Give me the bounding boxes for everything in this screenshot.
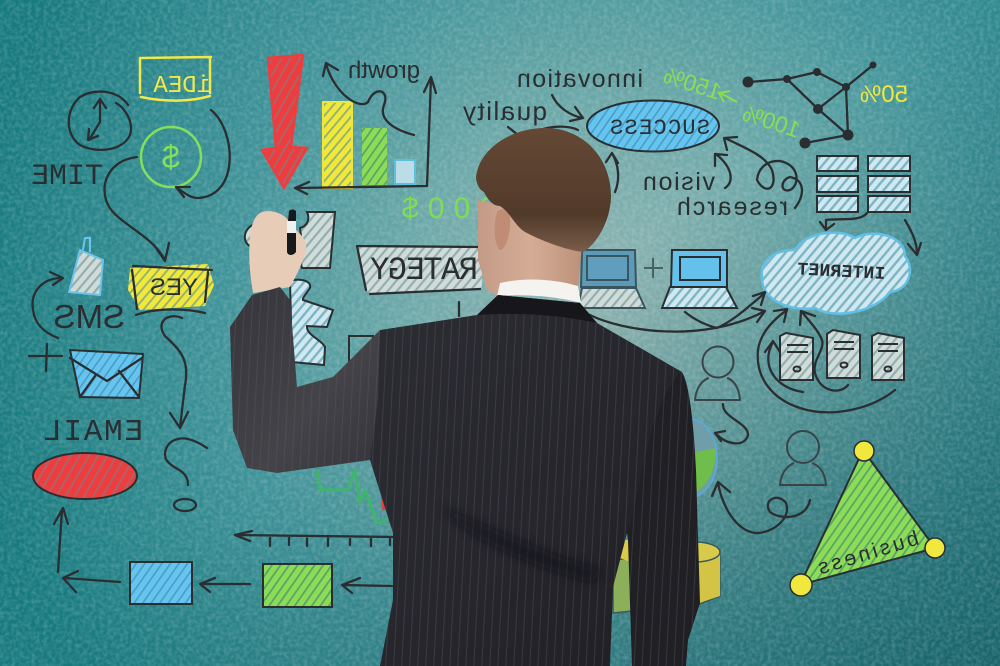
shirt collar [497, 279, 581, 303]
success oval [587, 100, 719, 152]
percent labels: 100% [740, 100, 803, 143]
icon: clock [69, 92, 131, 150]
label: sms with loop arrow: SMS [53, 298, 125, 335]
database cylinder [613, 540, 720, 613]
ear [495, 209, 510, 250]
arrow: person to pie [715, 404, 748, 443]
business triangle [790, 441, 945, 596]
green box [263, 564, 332, 607]
percent labels [661, 62, 803, 143]
marker cap [288, 210, 296, 221]
icon: idea sign: iDEA [153, 73, 211, 100]
arrow: innovation to success [552, 95, 583, 121]
hair [476, 128, 611, 252]
arrows: laptops to cloud [590, 292, 765, 332]
label: yes bubble: YES [150, 274, 198, 301]
strategy banner: RATEGY [370, 252, 478, 289]
icon: idea sign [140, 57, 211, 101]
squiggle question mark [165, 438, 207, 511]
hand [249, 211, 306, 293]
jacket collar [477, 295, 597, 323]
arrow: green to blue [200, 578, 250, 592]
bar chart [295, 77, 436, 194]
dollar amount: 000$ [402, 192, 496, 225]
sleeve pinstripes [627, 372, 700, 666]
arm pinstripes [230, 287, 380, 473]
puzzle pieces [245, 212, 335, 365]
label: yes bubble [128, 264, 214, 315]
arrow: into left corner [63, 571, 120, 592]
label: time: TIME [31, 160, 103, 194]
small box behind arm [349, 336, 374, 368]
internet cloud [762, 233, 910, 314]
blue box [130, 562, 192, 604]
marker band [287, 221, 296, 233]
internet cloud: INTERNET [797, 260, 886, 285]
icon: dollar coin [141, 127, 201, 187]
arrow: coin to yes [104, 157, 169, 261]
strategy banner [357, 246, 482, 316]
back creases [440, 505, 600, 580]
green scribble near elbow [317, 470, 388, 523]
success oval: SUCCESS [610, 116, 710, 141]
red oval [33, 453, 137, 499]
desktop towers [780, 330, 904, 380]
label: vision and research: vision [643, 168, 715, 196]
label: vision and research: research [677, 193, 788, 221]
long timeline arrow [235, 531, 395, 546]
icon: envelope [70, 350, 143, 398]
arrow: head to success [508, 127, 618, 192]
man [230, 128, 700, 666]
percent labels: 150% [661, 62, 724, 105]
label: email: EMAIL [43, 415, 143, 450]
arrow: person loop [712, 482, 810, 533]
marker [287, 232, 296, 255]
network diagram [742, 62, 876, 148]
icon: dollar coin: $ [162, 139, 180, 175]
laptops [578, 250, 737, 308]
neck [478, 200, 583, 296]
arrow: idea to coin [176, 110, 230, 198]
arrow: bottom left upward [54, 508, 68, 572]
icon: phone [69, 238, 103, 295]
label: sms with loop arrow [33, 272, 125, 338]
right sleeve [627, 372, 700, 666]
arrow: into green box [342, 578, 392, 593]
arrows: towers to cloud [758, 309, 895, 412]
business triangle: business [815, 527, 921, 579]
growth label and arrow [323, 57, 420, 135]
person icons [695, 346, 826, 485]
label: vision and research [643, 137, 802, 221]
label: innovation: innovation [517, 65, 643, 93]
server rack [817, 156, 910, 212]
label: 50 percent: 50% [860, 81, 908, 108]
label: quality: quality [463, 96, 547, 126]
raised arm [230, 287, 380, 473]
arrow: yes to email [161, 316, 188, 428]
red down arrow [262, 55, 307, 188]
icon: plus [29, 344, 62, 371]
pie chart behind man [663, 419, 717, 497]
jacket [370, 295, 682, 666]
growth label and arrow: growth [348, 57, 420, 84]
arrows: rack to cloud [820, 213, 921, 255]
jacket pinstripes [370, 295, 682, 666]
